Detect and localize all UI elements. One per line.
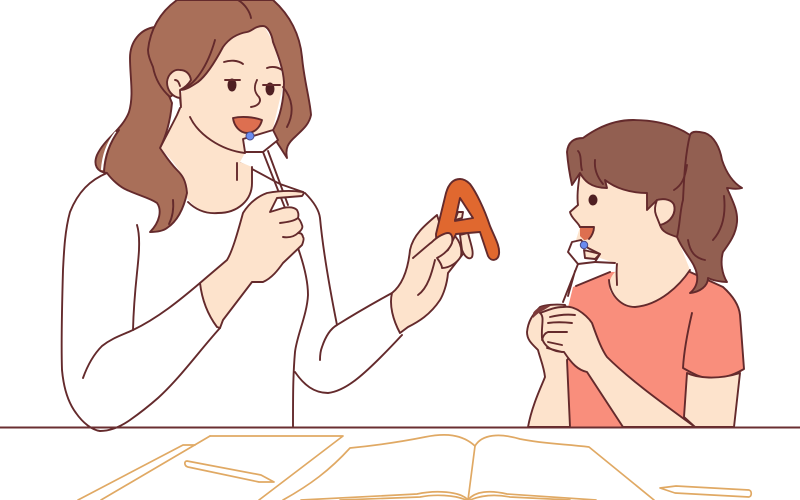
woman nose [251,80,260,107]
woman ear detail [175,80,180,86]
woman face and neck skin [160,24,284,213]
woman eyes [224,61,282,96]
open book [283,435,654,500]
letter A [436,179,499,260]
woman neck crease [236,163,238,180]
girl nose and chin [570,173,580,227]
girl eye [588,194,598,206]
woman ear [167,70,191,107]
girl ear [655,199,674,225]
pencil left [185,461,274,482]
woman finger lines [280,218,298,237]
woman sweater outline [62,163,402,431]
girl left arm and hand [527,305,580,427]
girl mouth [580,227,594,240]
girl hair [567,120,690,237]
woman jaw line [190,117,245,153]
girl mouth tool [563,240,615,302]
finger seen through letter A [455,212,463,220]
table edge [0,426,800,428]
girl ponytail [660,132,742,293]
girl shirt [560,270,744,427]
woman neck lines [160,108,252,213]
notebook paper [78,436,343,500]
girl right arm [684,373,740,427]
girl neck lines [609,264,690,307]
girl finger lines [542,315,575,352]
girl mouth line [580,227,594,239]
girl shirt outline [576,272,744,378]
girl right forearm and hand [540,307,695,427]
girl figure [527,120,744,427]
woman figure [62,0,499,431]
woman right hand [200,191,304,328]
woman ponytail strands [102,130,173,224]
girl face and neck skin [570,165,690,307]
girl hair strands [578,151,725,260]
woman mouth tool [243,130,288,208]
woman left fingers [413,233,473,295]
woman hair [148,0,311,158]
woman left hand back [391,215,470,333]
woman hair strands [180,0,292,127]
woman mouth [233,117,262,133]
woman ponytail [95,27,187,232]
pencil right [660,486,751,497]
girl hand fingertip [533,305,552,318]
